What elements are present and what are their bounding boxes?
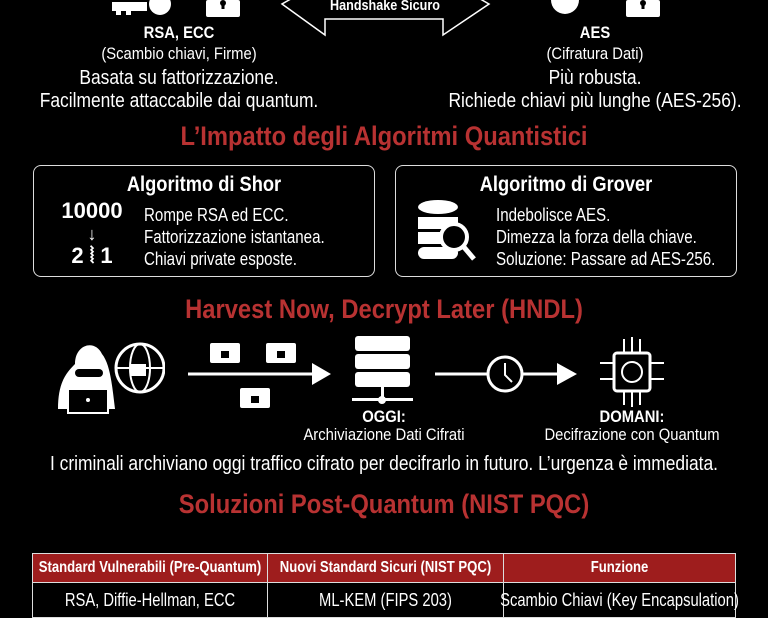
table: pqc: Nuovi Standard Sicuri (NIST PQC) [280, 559, 491, 576]
title: soluzioni: Soluzioni Post-Quantum (NIST PQC) [179, 489, 589, 519]
text: hndl summary: I criminali archiviano oggi traffico cifrato per decifrarlo in futuro. L’urgenza è immediata. [50, 453, 718, 475]
title: hndl: Harvest Now, Decrypt Later (HNDL) [185, 294, 583, 324]
panel: shor [33, 165, 375, 277]
icon: circle right [551, 0, 579, 14]
arrow: clock [435, 356, 577, 392]
text: symmetric: Richiede chiavi più lunghe (AES-256). [448, 90, 742, 112]
table: pqc: Funzione [591, 559, 648, 576]
label: domani [544, 407, 720, 444]
text: grover [496, 205, 715, 269]
text: symmetric [448, 23, 742, 112]
text: shor: Fattorizzazione istantanea. [144, 227, 325, 247]
table: pqc: RSA, Diffie-Hellman, ECC [65, 590, 235, 610]
text: shor: Rompe RSA ed ECC. [144, 205, 289, 225]
text: symmetric: (Cifratura Dati) [547, 44, 643, 63]
text: symmetric: AES [580, 23, 610, 42]
heading: grover: Algoritmo di Grover [480, 173, 652, 196]
text: symmetric: Più robusta. [549, 67, 641, 89]
text: grover: Dimezza la forza della chiave. [496, 227, 697, 247]
label: oggi: Archiviazione Dati Cifrati [303, 425, 465, 444]
icon: factorization [61, 198, 123, 268]
label: oggi [303, 407, 465, 444]
arrow: handshake [280, 0, 490, 36]
text: asymmetric: (Scambio chiavi, Firme) [101, 44, 257, 63]
icon: server [352, 336, 413, 404]
table: pqc [32, 553, 739, 618]
panel: grover [395, 165, 737, 277]
table: pqc: Standard Vulnerabili (Pre-Quantum) [39, 559, 261, 576]
icon: lock left [206, 0, 240, 17]
label: domani: DOMANI: [600, 407, 664, 426]
icon: lock right [626, 0, 660, 17]
icon: key [112, 0, 171, 15]
text: asymmetric [40, 23, 318, 112]
text: asymmetric: RSA, ECC [144, 23, 214, 42]
label: domani: Decifrazione con Quantum [544, 425, 720, 444]
table: pqc: Scambio Chiavi (Key Encapsulation) [500, 590, 739, 610]
icon: database search [418, 200, 476, 261]
icon: quantum chip [600, 337, 664, 407]
arrow: harvest with folders [188, 343, 331, 408]
text: shor: Chiavi private esposte. [144, 249, 297, 269]
text: asymmetric: Basata su fattorizzazione. [79, 67, 279, 89]
heading: shor: Algoritmo di Shor [127, 173, 281, 196]
icon: factorization: ↓ [88, 224, 96, 244]
icon: hacker globe [58, 342, 165, 414]
title: impatto: L’Impatto degli Algoritmi Quantistici [180, 121, 588, 151]
text: grover: Indebolisce AES. [496, 205, 610, 225]
table: pqc: ML-KEM (FIPS 203) [319, 590, 452, 610]
text: grover: Soluzione: Passare ad AES-256. [496, 249, 715, 269]
icon: factorization: 10000 [61, 198, 123, 223]
text: shor [144, 205, 325, 269]
text: asymmetric: Facilmente attaccabile dai quantum. [40, 90, 318, 112]
label: oggi: OGGI: [362, 407, 406, 426]
icon: factorization: 2 ⦚ 1 [71, 243, 113, 268]
